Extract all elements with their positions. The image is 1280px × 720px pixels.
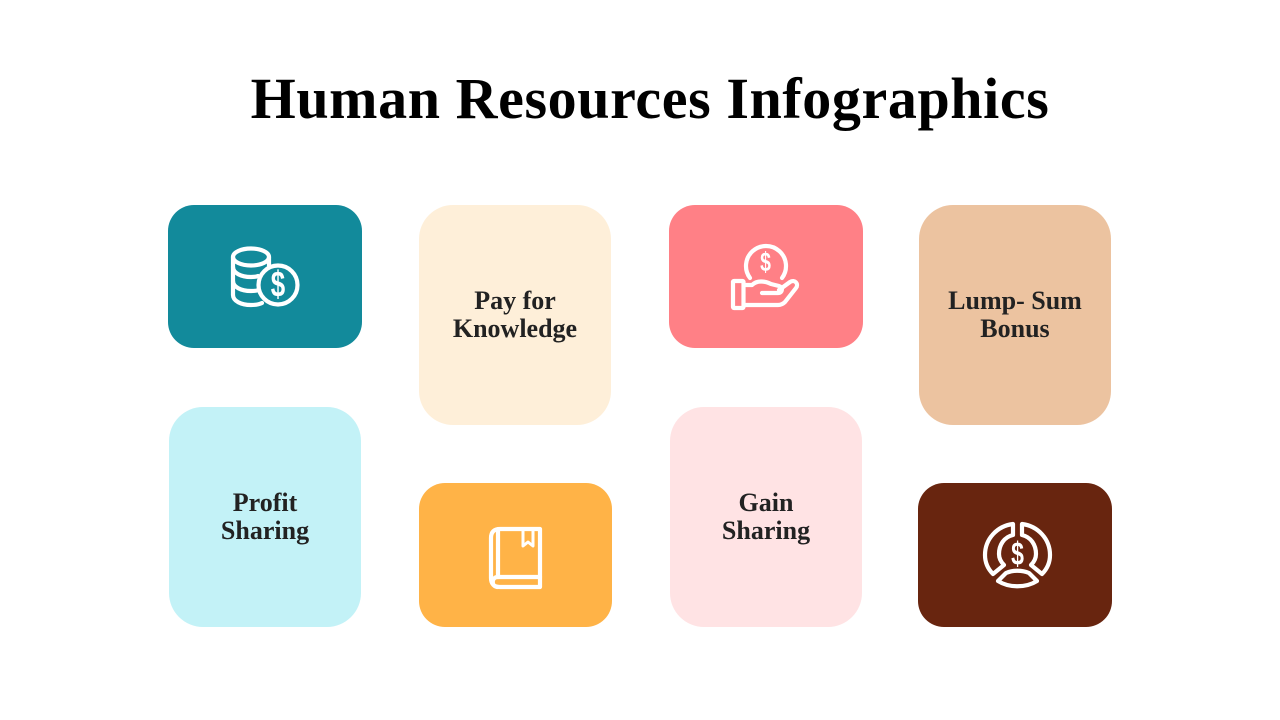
panel: hand icon card	[669, 205, 863, 348]
panel: Lump-Sum Bonus: Bonus	[980, 314, 1050, 343]
panel: Lump-Sum Bonus: Lump- Sum	[948, 286, 1082, 315]
panel: Profit Sharing: Sharing	[221, 516, 309, 545]
icon: segmented dollar ring: $	[1011, 536, 1024, 571]
panel: Lump-Sum Bonus	[919, 205, 1111, 425]
title: Human Resources Infographics	[251, 66, 1049, 131]
icon: coins with dollar	[230, 246, 300, 308]
panel: Pay for Knowledge: Pay for	[474, 286, 556, 315]
panel: book icon card	[419, 483, 612, 627]
panel: Pay for Knowledge: Knowledge	[453, 314, 577, 343]
panel: coins icon card	[168, 205, 362, 348]
icon: book	[488, 526, 542, 590]
icon: segmented dollar ring	[982, 522, 1052, 588]
panel: Profit Sharing	[169, 407, 361, 627]
icon: hand holding coin: $	[760, 247, 771, 277]
panel: Gain Sharing: Sharing	[722, 516, 810, 545]
panel: target icon card	[918, 483, 1112, 627]
icon: hand holding coin	[730, 244, 800, 310]
panel: Gain Sharing	[670, 407, 862, 627]
panel: Profit Sharing: Profit	[233, 488, 297, 517]
icon: coins with dollar: $	[271, 264, 285, 305]
panel: Gain Sharing: Gain	[739, 488, 793, 517]
panel: Pay for Knowledge	[419, 205, 611, 425]
